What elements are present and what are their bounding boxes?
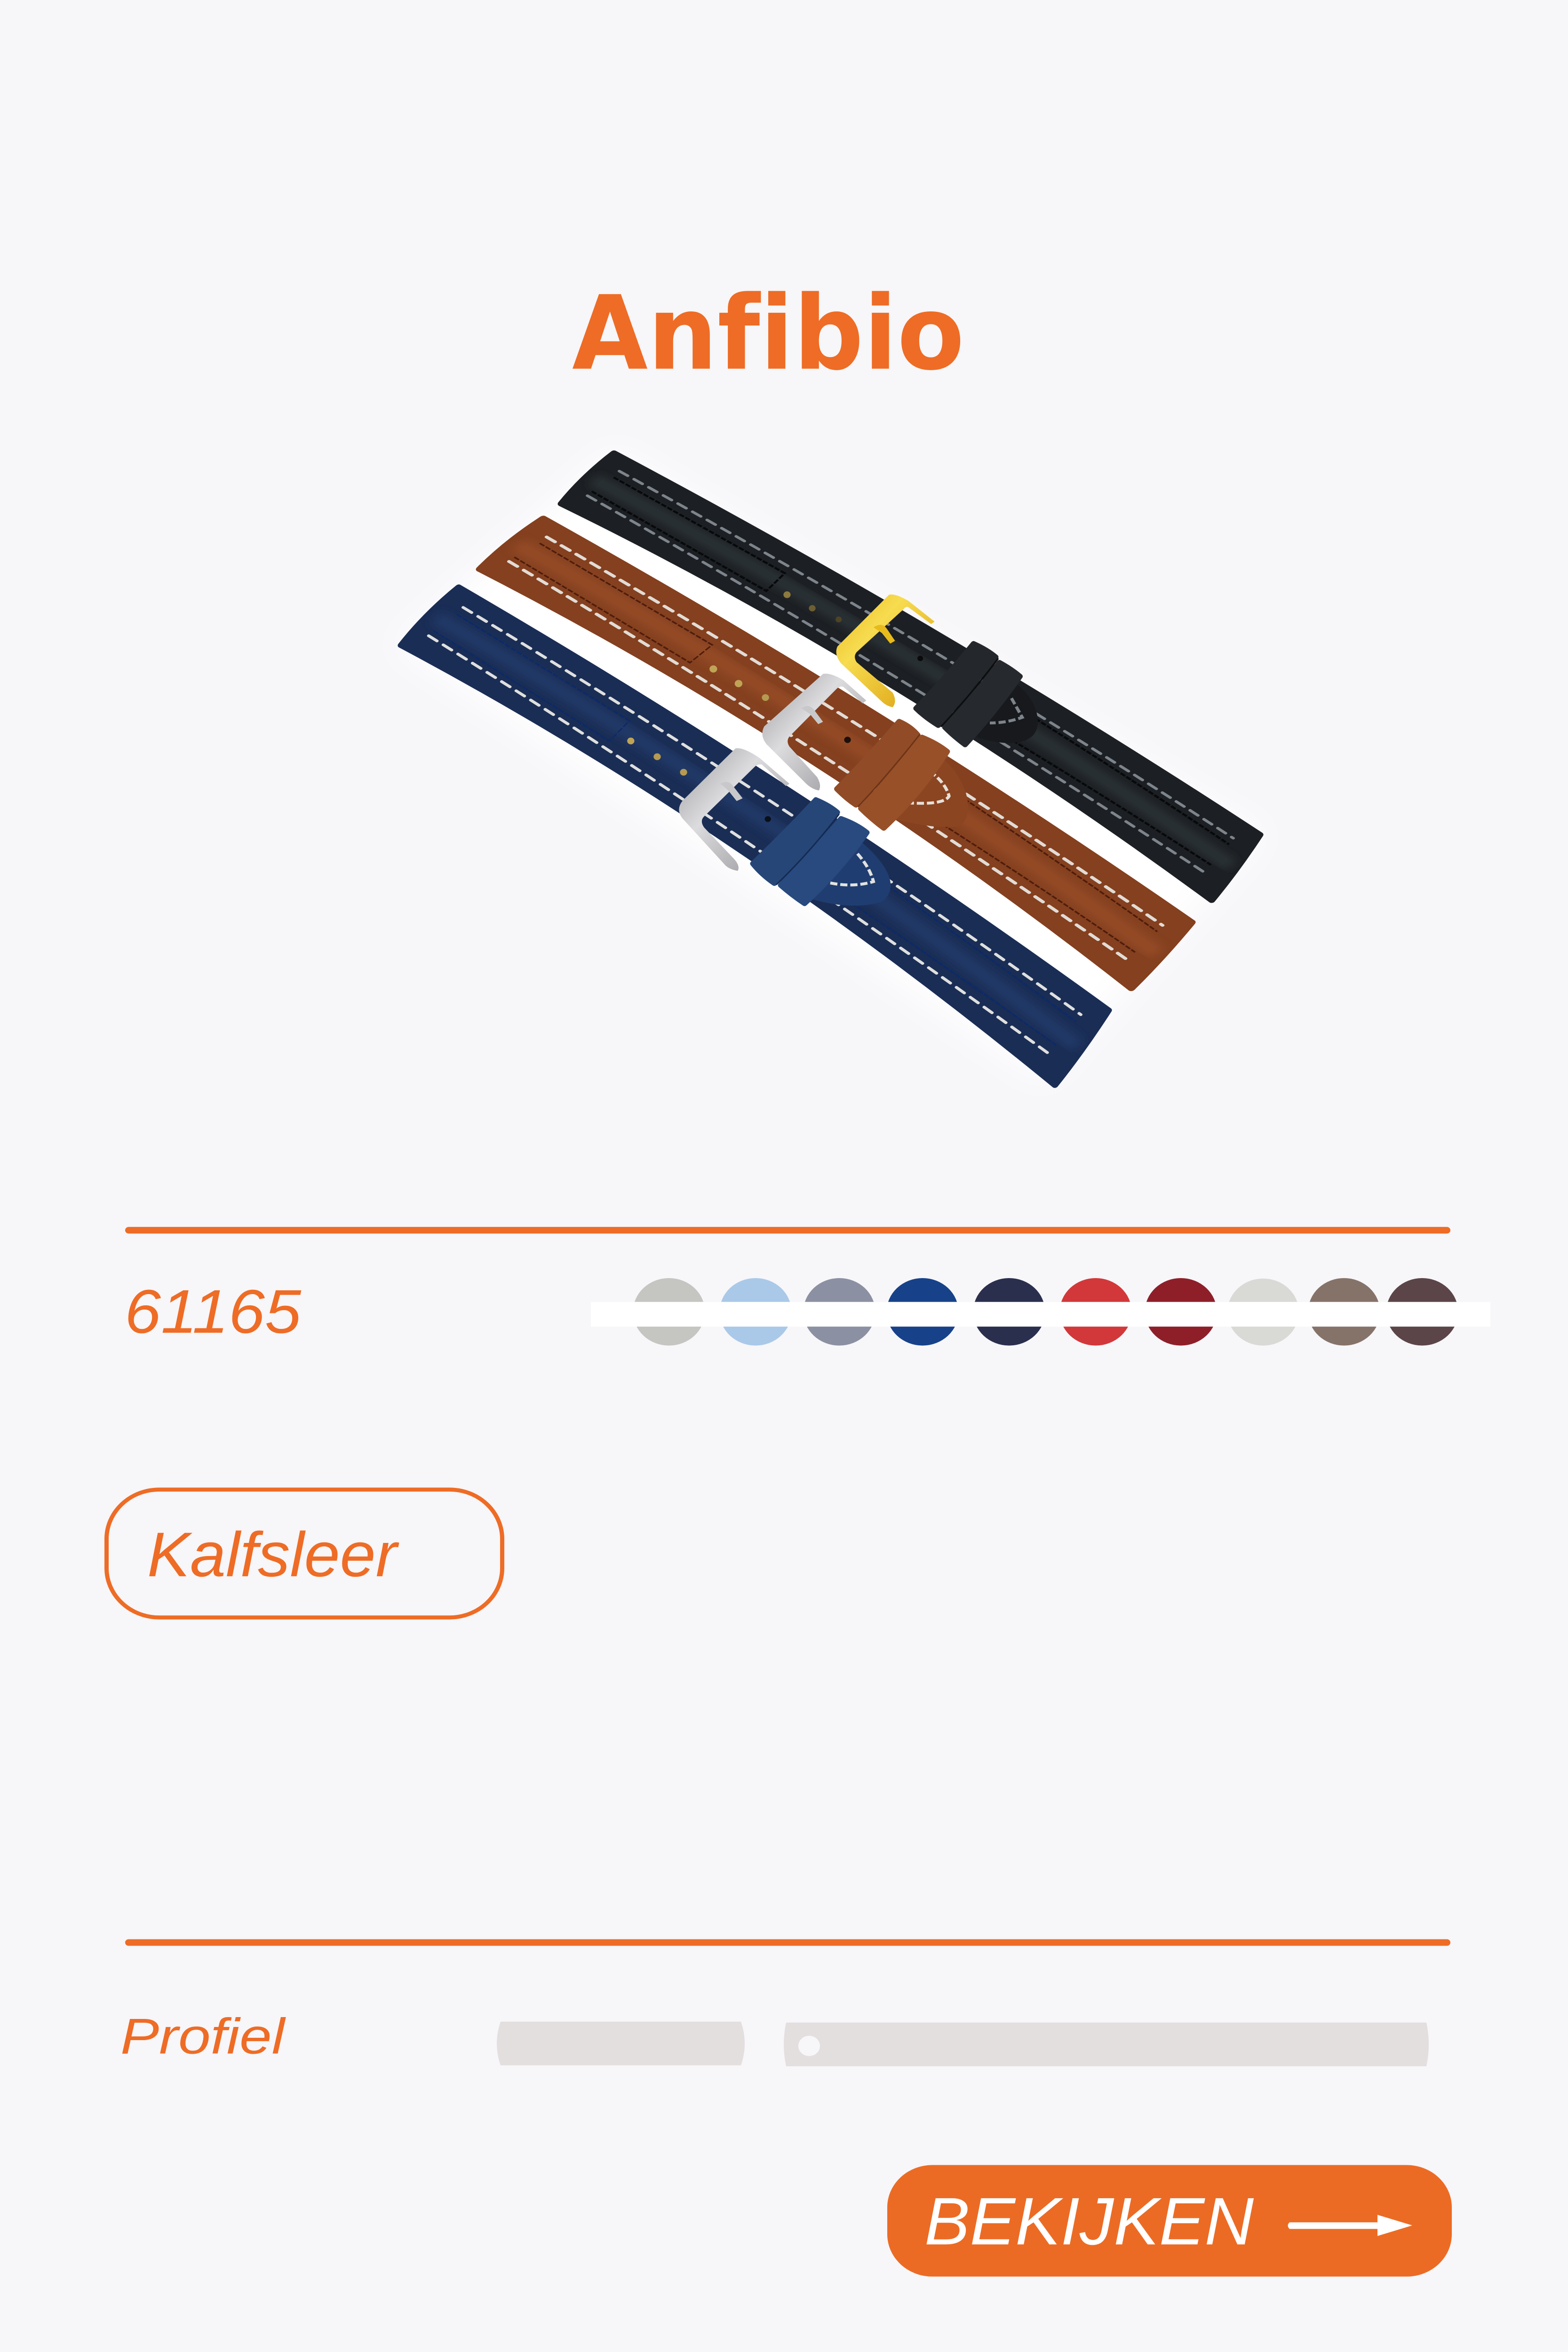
black strap bbox=[551, 446, 1279, 900]
silver buckle on brown strap bbox=[762, 674, 866, 790]
product photo: three watch straps bbox=[390, 446, 1279, 1085]
icon: arrow bbox=[1288, 2215, 1412, 2236]
black tail and keepers bbox=[916, 644, 1038, 745]
profile diagram: keeper piece bbox=[497, 2022, 745, 2066]
brown tail and keepers bbox=[837, 722, 968, 828]
blue tail and keepers bbox=[753, 800, 891, 906]
blue strap bbox=[390, 579, 1128, 1085]
brown strap bbox=[468, 511, 1212, 988]
gold buckle bbox=[836, 595, 935, 707]
top divider bbox=[125, 1227, 1450, 1233]
silver buckle on blue strap bbox=[679, 748, 789, 871]
article number: 61165 bbox=[125, 1277, 302, 1346]
bottom divider bbox=[125, 1939, 1450, 1946]
button: BEKIJKEN bbox=[924, 2185, 1254, 2259]
material tag bbox=[106, 1490, 502, 1617]
strap holes bbox=[627, 591, 923, 822]
material tag: Kalfsleer bbox=[147, 1520, 399, 1590]
button bbox=[887, 2165, 1452, 2277]
buckles, keepers and holes bbox=[627, 591, 1038, 906]
colour swatches bbox=[591, 1278, 1490, 1345]
profile label: Profiel bbox=[120, 2009, 287, 2064]
profile diagram: long piece bbox=[784, 2023, 1429, 2066]
title: Anfibio bbox=[572, 274, 964, 393]
